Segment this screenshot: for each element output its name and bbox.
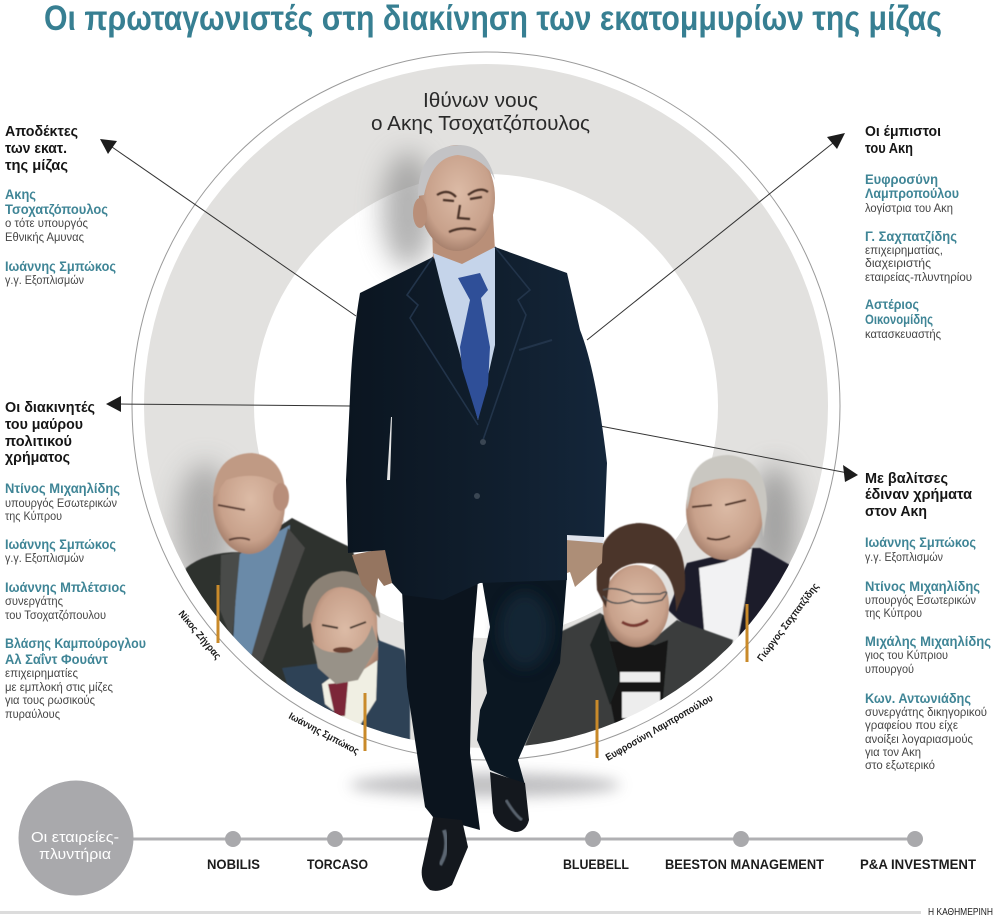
heading	[5, 400, 95, 466]
company names: BEESTON MANAGEMENT	[665, 856, 824, 872]
entry: ο τότε υπουργός	[5, 218, 88, 230]
entry: γιος του Κύπριου	[865, 650, 948, 662]
right trouser leg	[477, 575, 567, 785]
entry: Ιωάννης Σμπώκος	[5, 259, 116, 274]
entry: της Κύπρου	[5, 511, 62, 523]
arrow: top left	[100, 139, 356, 316]
heading: των εκατ.	[5, 141, 67, 157]
entry: με εμπλοκή στις μίζες	[5, 682, 113, 694]
neck	[432, 215, 495, 270]
main figure: Akis Tsochatzopoulos	[346, 145, 607, 891]
entry	[865, 297, 941, 341]
entry: γ.γ. Εξοπλισμών	[5, 553, 84, 565]
portrait captions: Νίκος Ζήγρας	[176, 609, 223, 662]
facial features	[437, 190, 488, 232]
entry	[865, 579, 980, 620]
arm gap	[387, 417, 392, 480]
entry: Γ. Σαχπατζίδης	[865, 229, 957, 244]
entry: Λαμπροπούλου	[865, 186, 959, 201]
panel: recipients of the bribes	[5, 124, 116, 287]
entry: του Τσοχατζόπουλου	[5, 610, 106, 622]
left trouser leg	[402, 580, 480, 830]
heading: του μαύρου	[5, 417, 83, 433]
entry: Αστέριος	[865, 297, 919, 312]
portraits group	[177, 453, 797, 750]
left shoe	[422, 817, 468, 891]
entry: κατασκευαστής	[865, 329, 941, 341]
label circle	[18, 780, 134, 896]
jacket	[346, 247, 607, 600]
heading: του Ακη	[865, 141, 913, 157]
entry: Ακης	[5, 187, 36, 202]
heading: Οι έμπιστοι	[865, 124, 941, 140]
heading: mastermind	[371, 90, 590, 135]
panel: those who gave money in suitcases	[865, 471, 991, 772]
entry: Τσοχατζόπουλος	[5, 202, 108, 217]
company names: P&A INVESTMENT	[860, 856, 976, 872]
company dots	[225, 831, 923, 847]
entry: Οικονομίδης	[865, 312, 933, 327]
company names	[207, 856, 976, 872]
portrait captions	[176, 581, 822, 764]
entry: Ιωάννης Σμπώκος	[865, 535, 976, 550]
entry: συνεργάτης δικηγορικού	[865, 707, 987, 719]
circular backdrop	[132, 52, 840, 760]
heading: χρήματος	[5, 450, 70, 466]
head	[419, 145, 495, 251]
portrait captions: Γιώργος Σαχπατζίδης	[756, 581, 822, 664]
label circle: Οι εταιρείες-	[31, 830, 119, 846]
right thigh highlight	[499, 592, 551, 668]
panel: brokers of black political money	[5, 400, 146, 721]
entry: υπουργός Εσωτερικών	[865, 595, 976, 607]
entry: διαχειριστής	[865, 258, 931, 270]
arrow: middle right	[600, 426, 858, 482]
company names: TORCASO	[307, 856, 368, 872]
entry: για τον Ακη	[865, 747, 921, 759]
right cuff	[566, 533, 604, 543]
portrait: Ioannis Sboukos	[282, 571, 410, 750]
bottom band: shell companies	[18, 780, 976, 896]
heading: Οι διακινητές	[5, 400, 95, 416]
entry: Μιχάλης Μιχαηλίδης	[865, 634, 991, 649]
portrait captions: Ευφροσύνη Λαμπροπούλου	[604, 693, 715, 764]
heading: της μίζας	[5, 158, 68, 174]
company names: BLUEBELL	[563, 856, 629, 872]
entry: συνεργάτης	[5, 596, 63, 608]
ear	[413, 198, 427, 228]
heading: Αποδέκτες	[5, 124, 78, 140]
entry: γ.γ. Εξοπλισμών	[5, 275, 84, 287]
entry: Ντίνος Μιχαηλίδης	[865, 579, 980, 594]
entry: Βλάσης Καμπούρογλου	[5, 636, 146, 651]
portrait: Nikos Zigras	[180, 453, 385, 720]
portrait: Giorgos Sachpatzidis	[668, 455, 790, 660]
entry	[5, 537, 116, 565]
entry: Ευφροσύνη	[865, 172, 938, 187]
company names: NOBILIS	[207, 856, 260, 872]
entry: Κων. Αντωνιάδης	[865, 691, 971, 706]
entry	[5, 636, 146, 721]
entry: για τους ρωσικούς	[5, 695, 95, 707]
entry: υπουργού	[865, 664, 914, 676]
left hand	[352, 548, 392, 598]
arrow: top right	[587, 133, 845, 340]
shirt	[433, 247, 495, 420]
entry: Ντίνος Μιχαηλίδης	[5, 481, 120, 496]
heading: mastermind: Ιθύνων νους	[423, 90, 538, 112]
heading	[865, 471, 972, 520]
entry: επιχειρηματίες	[5, 668, 78, 680]
entry: ανοίξει λογαριασμούς	[865, 734, 973, 746]
label circle: πλυντήρια	[39, 847, 111, 863]
heading: Με βαλίτσες	[865, 471, 948, 487]
portrait captions: Ιωάννης Σμπώκος	[287, 711, 361, 757]
entry: γ.γ. Εξοπλισμών	[865, 552, 943, 564]
tie	[458, 273, 490, 420]
entry: Ιωάννης Μπλέτσιος	[5, 580, 126, 595]
entry	[5, 580, 126, 622]
entry	[865, 535, 976, 564]
entry: λογίστρια του Ακη	[865, 203, 953, 215]
portrait: Efrosyni Lamprpoulou	[523, 523, 733, 750]
entry: στο εξωτερικό	[865, 760, 935, 772]
portrait markers	[218, 585, 747, 758]
panel: Akis's trusted associates	[865, 124, 972, 341]
entry	[5, 187, 108, 244]
entry: επιχειρηματίας,	[865, 245, 943, 257]
arrows	[100, 133, 858, 482]
hair	[418, 145, 495, 196]
heading	[865, 124, 941, 157]
ground shadow	[350, 773, 620, 797]
entry: Ιωάννης Σμπώκος	[5, 537, 116, 552]
lapels	[407, 247, 530, 440]
entry	[865, 172, 959, 215]
entry	[5, 481, 120, 523]
entry: της Κύπρου	[865, 608, 922, 620]
entry: Αλ Σαΐντ Φουάντ	[5, 652, 108, 667]
portrait shadows	[177, 463, 797, 587]
entry	[865, 229, 972, 284]
entry: πυραύλους	[5, 709, 60, 721]
arrow: middle left	[106, 396, 350, 412]
heading: έδιναν χρήματα	[865, 487, 972, 503]
heading: πολιτικού	[5, 434, 72, 450]
heading	[5, 124, 78, 174]
right hand	[567, 537, 603, 587]
entry	[865, 634, 991, 676]
entry: Εθνικής Αμυνας	[5, 232, 84, 244]
heading: mastermind: ο Ακης Τσοχατζόπουλος	[371, 113, 590, 135]
entry	[865, 691, 987, 772]
heading: στον Ακη	[865, 504, 927, 520]
entry	[5, 259, 116, 287]
right shoe	[490, 772, 529, 832]
entry: εταιρείας-πλυντηρίου	[865, 272, 972, 284]
footer rule	[0, 911, 921, 914]
head shadow	[382, 152, 434, 268]
entry: γραφείου που είχε	[865, 720, 958, 732]
entry: υπουργός Εσωτερικών	[5, 498, 117, 510]
